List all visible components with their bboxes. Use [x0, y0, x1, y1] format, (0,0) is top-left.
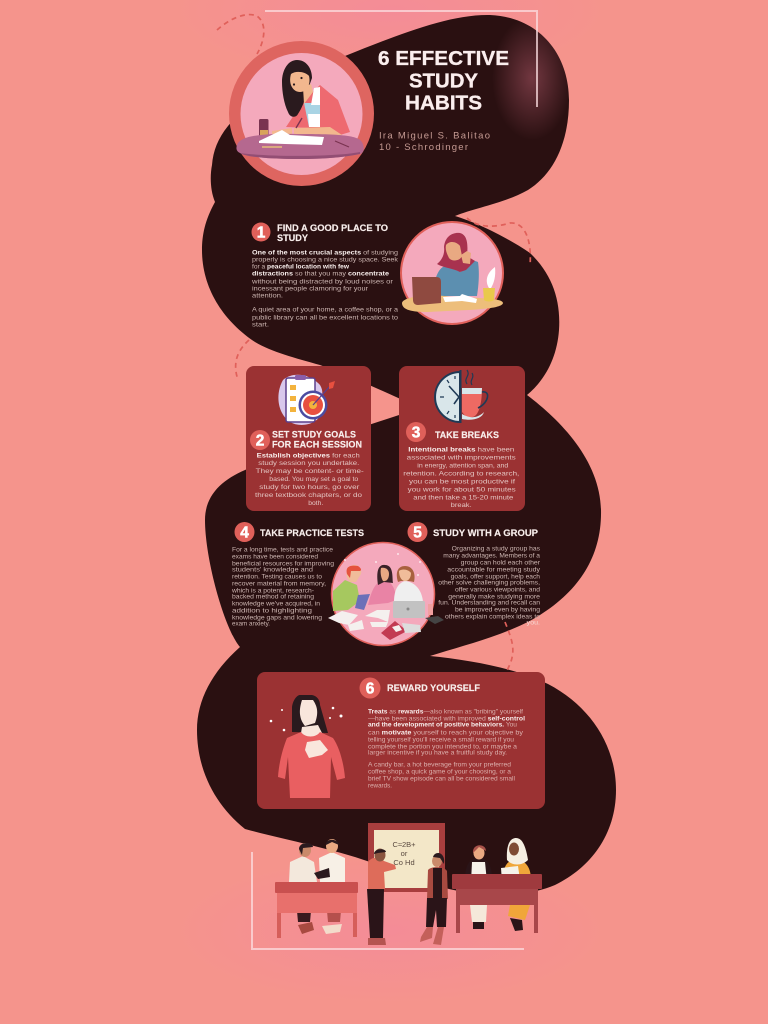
dark ribbon background: [197, 15, 616, 895]
body 1: distractions so that you may concentrate: [252, 270, 389, 277]
body 5: fun. Understanding and recall can: [438, 599, 540, 606]
badge 3: [406, 422, 426, 442]
body 1: properly is choosing a nice study space. Seek: [252, 256, 399, 263]
body 4: exam anxiety.: [232, 620, 270, 627]
heading 2: [272, 430, 362, 450]
body 5: many advantages. Members of a: [443, 552, 540, 559]
body 4: beneficial resources for improving: [232, 560, 334, 567]
body 3: you work for about 50 minutes: [408, 486, 517, 494]
badge 1: [252, 222, 270, 242]
body 5: goals, offer support, help each: [451, 573, 540, 580]
heading 5: STUDY WITH A GROUP: [433, 528, 538, 538]
body 1: start.: [252, 321, 269, 328]
teacher: [367, 848, 396, 945]
body 4: [231, 546, 334, 627]
heading 2: SET STUDY GOALS: [272, 430, 356, 440]
body 3: [403, 446, 519, 509]
body 2: three textbook chapters, or do: [255, 492, 362, 499]
panel 6: reward yourself: [257, 672, 545, 809]
body 5: accountable for meeting study: [447, 566, 541, 573]
body 5: you.: [527, 619, 540, 626]
card 3: take breaks: [399, 366, 525, 511]
body 5: offer various viewpoints, and: [455, 586, 540, 593]
right group at desk: [452, 838, 542, 933]
body 1: A quiet area of your home, a coffee shop, or a: [252, 306, 398, 313]
body 4: knowledge gaps and lowering: [232, 614, 322, 621]
body 6: telling yourself you'll receive a small reward if you: [368, 736, 514, 743]
body 3: Intentional breaks have been: [408, 446, 515, 454]
body 1: for a peaceful location with few: [252, 263, 350, 270]
heading 1: FIND A GOOD PLACE TO: [277, 223, 388, 233]
badge 6: 6: [366, 680, 375, 698]
body 5: [438, 545, 541, 626]
body 4: backed method of retaining: [232, 593, 314, 600]
title: HABITS: [405, 92, 482, 114]
body 2: both.: [308, 500, 323, 507]
body 3: you can be most productive if: [409, 478, 515, 486]
body 6: [368, 708, 525, 789]
heading 3: TAKE BREAKS: [435, 430, 499, 440]
body 4: exams have been considered: [232, 553, 318, 560]
body 4: For a long time, tests and practice: [232, 546, 333, 553]
body 3: break.: [451, 502, 472, 509]
body 6: Treats as rewards—also known as "bribing" yourself: [368, 708, 523, 715]
frame lines: [252, 11, 537, 949]
body 6: A candy bar, a hot beverage from your preferred: [368, 761, 511, 768]
body 1: incessant people clamoring for your: [252, 285, 369, 292]
body 4: addition to highlighting: [232, 607, 312, 614]
whiteboard: or: [401, 849, 408, 858]
illustration: woman with hands on heart: [270, 695, 345, 798]
body 2: study session you undertake.: [258, 460, 359, 467]
body 6: brief TV show episode can all be considered small: [368, 775, 516, 782]
body 1: public library can all be excellent locations to: [252, 314, 398, 321]
body 4: which is a potent, research-: [231, 587, 314, 594]
illustration: study group: [328, 542, 444, 646]
whiteboard: Co Hd: [393, 858, 415, 867]
card 2: set study goals: [246, 366, 371, 511]
heading 2: FOR EACH SESSION: [272, 440, 362, 450]
badge 3: 3: [412, 424, 421, 442]
body 4: retention. Testing causes us to: [232, 573, 322, 580]
body 4: students' knowledge and: [232, 566, 313, 573]
body 2: based. You may set a goal to: [269, 476, 359, 483]
body 5: group can hold each other: [461, 559, 541, 566]
section 1: find a good place to study: [251, 222, 503, 328]
left group at desk: [275, 839, 358, 938]
badge 1: 1: [257, 224, 266, 242]
body 2: [255, 452, 364, 507]
whiteboard: C≈2B+: [392, 840, 416, 849]
body 6: —have been associated with improved self-control: [368, 715, 525, 722]
body 2: Establish objectives for each: [257, 452, 360, 459]
body 5: others explain complex ideas to: [445, 613, 540, 620]
heading 1: [277, 223, 388, 243]
body 1: [251, 249, 399, 328]
body 5: generally make studying more: [448, 593, 540, 600]
author: 10 - Schrodinger: [379, 142, 468, 153]
body 6: larger incentive if you have a fruitful study day.: [368, 749, 507, 756]
heading 6: REWARD YOURSELF: [387, 683, 481, 693]
heading 1: STUDY: [277, 233, 308, 243]
body 5: other solve challenging problems,: [438, 579, 540, 586]
author: [379, 130, 490, 153]
body 4: knowledge we've acquired, in: [232, 600, 320, 607]
body 2: study for two hours, go over: [259, 484, 360, 491]
title: [378, 47, 509, 114]
body 4: recover material from memory,: [232, 580, 326, 587]
section 4: take practice tests: [231, 522, 364, 627]
body 3: retention. According to research,: [403, 470, 519, 478]
illustration: woman at laptop: [401, 222, 503, 324]
body 3: in energy, attention span, and: [417, 462, 509, 470]
body 6: and the development of positive behaviors. You: [368, 721, 517, 728]
illustration: classroom scene: [275, 823, 542, 945]
icon: clock and cup: [435, 370, 488, 423]
body 6: complete the portion you intended to, or maybe a: [368, 743, 517, 750]
body 5: Organizing a study group has: [452, 545, 541, 552]
decorative dashed paths: [217, 15, 530, 672]
body 1: One of the most crucial aspects of studying: [252, 249, 398, 256]
badge 2: 2: [256, 432, 264, 450]
body 6: coffee shop, a quick game of your choosing, or a: [368, 768, 511, 775]
body 6: can motivate yourself to reach your objective by: [368, 729, 524, 736]
author: Ira Miguel S. Balitao: [379, 130, 490, 142]
badge 6: [360, 678, 380, 698]
student standing: [420, 853, 448, 945]
icon: clipboard and target: [278, 375, 335, 425]
body 2: They may be content- or time-: [256, 468, 364, 475]
title: STUDY: [409, 70, 478, 92]
body 1: without being distracted by loud noises or: [251, 278, 394, 285]
heading 4: TAKE PRACTICE TESTS: [260, 528, 364, 538]
body 1: attention.: [252, 292, 283, 299]
badge 4: 4: [240, 524, 249, 542]
badge 2: [250, 430, 270, 450]
section 5: study with a group: [408, 522, 541, 626]
body 6: rewards.: [368, 782, 392, 789]
badge 5: 5: [413, 524, 422, 542]
illustration: student writing in circle: [229, 41, 374, 186]
whiteboard: [368, 823, 445, 892]
title: 6 EFFECTIVE: [378, 47, 509, 70]
body 3: and then take a 15-20 minute: [413, 494, 514, 502]
body 5: be improved even by having: [455, 606, 540, 613]
body 3: associated with improvements: [407, 454, 517, 462]
